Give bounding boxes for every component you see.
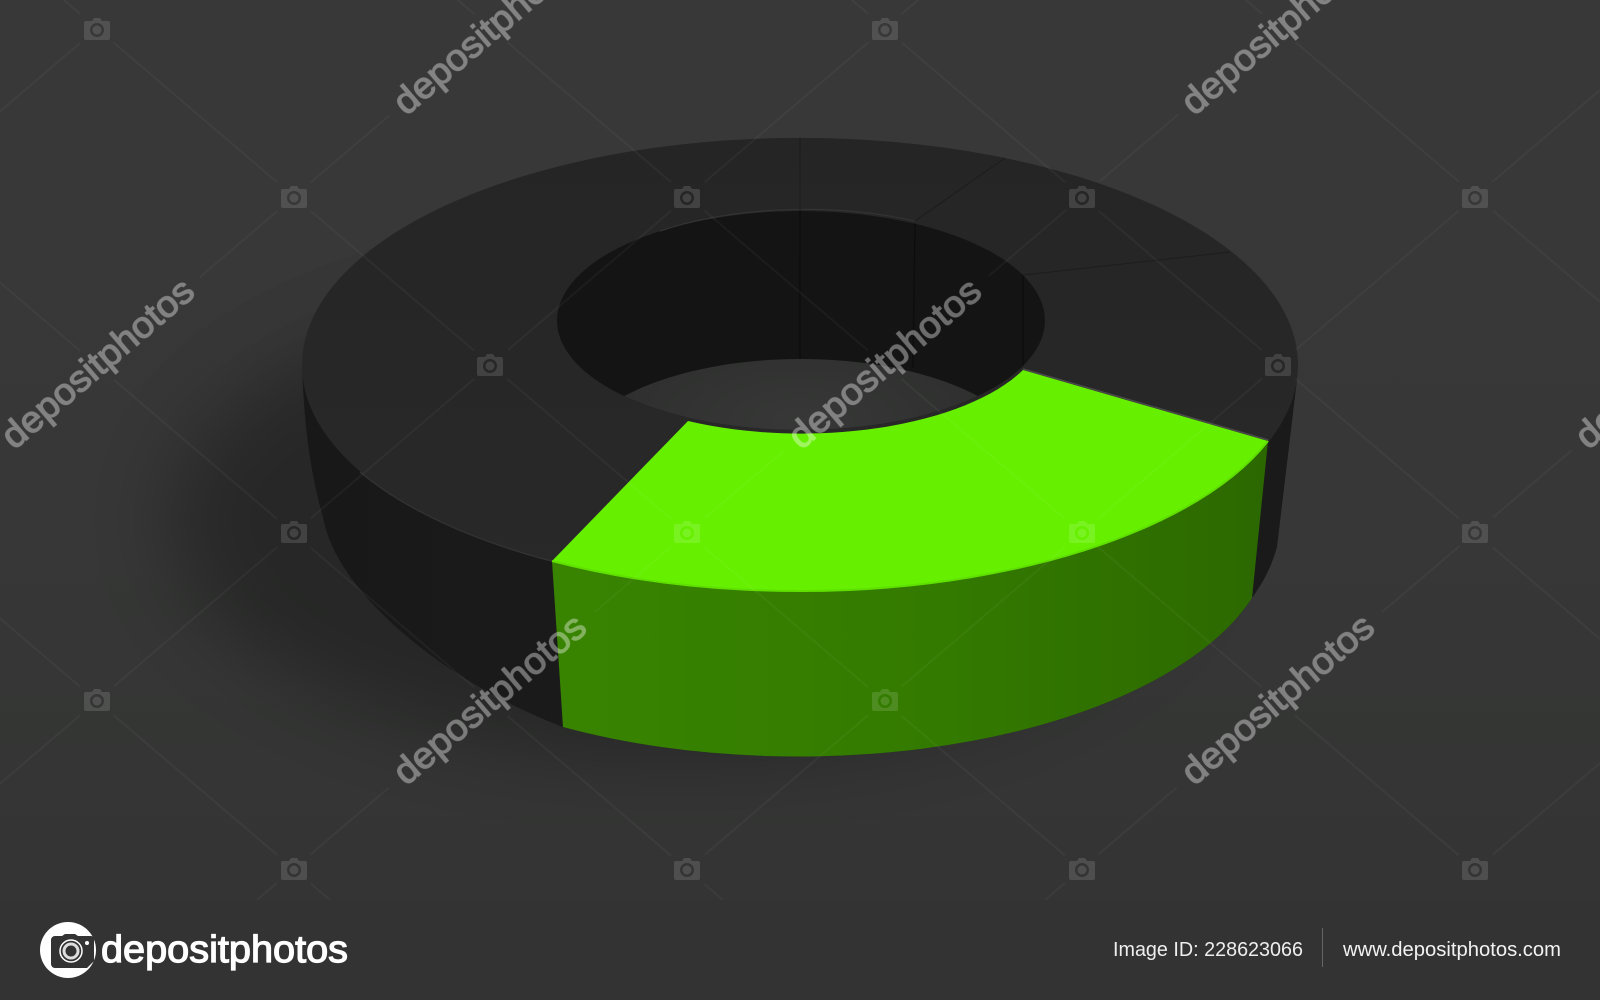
logo lens inner [64, 944, 78, 958]
donut centre hole [557, 211, 1045, 430]
watermark words [0, 0, 1600, 793]
watermark camera icons [84, 18, 1488, 880]
footer background [0, 900, 1600, 1000]
depositphotos logo [40, 922, 348, 978]
outer rim highlight [360, 472, 552, 561]
dark segment edge beside green [1023, 369, 1268, 440]
soft ground shadow [170, 285, 1190, 755]
logo wordmark: depositphotos [101, 929, 348, 971]
top face seams [800, 138, 1230, 275]
watermark diagonal lines [321, 218, 1211, 756]
logo lens [60, 940, 82, 962]
logo flash [85, 941, 89, 945]
inner wall [557, 211, 1045, 396]
watermark words: depositphotos [780, 270, 989, 457]
3D donut chart [302, 138, 1298, 757]
green segment bright edge [552, 441, 1268, 591]
inner wall seams [912, 224, 1024, 366]
watermark words: depositphotos [385, 606, 594, 793]
donut outer side wall [302, 365, 1297, 757]
hole upper rim highlight [660, 209, 915, 231]
dark segments top face [302, 138, 1298, 592]
footer divider [1322, 928, 1323, 967]
green segment side [552, 441, 1268, 757]
green segment top face [552, 370, 1268, 591]
hole floor [624, 359, 978, 430]
website url: www.depositphotos.com [1342, 939, 1561, 961]
logo disc [40, 922, 96, 978]
logo camera [51, 934, 94, 968]
image id: Image ID: 228623066 [1113, 939, 1303, 961]
watermark words: depositphotos [1173, 606, 1382, 793]
footer bar [0, 900, 1600, 1000]
